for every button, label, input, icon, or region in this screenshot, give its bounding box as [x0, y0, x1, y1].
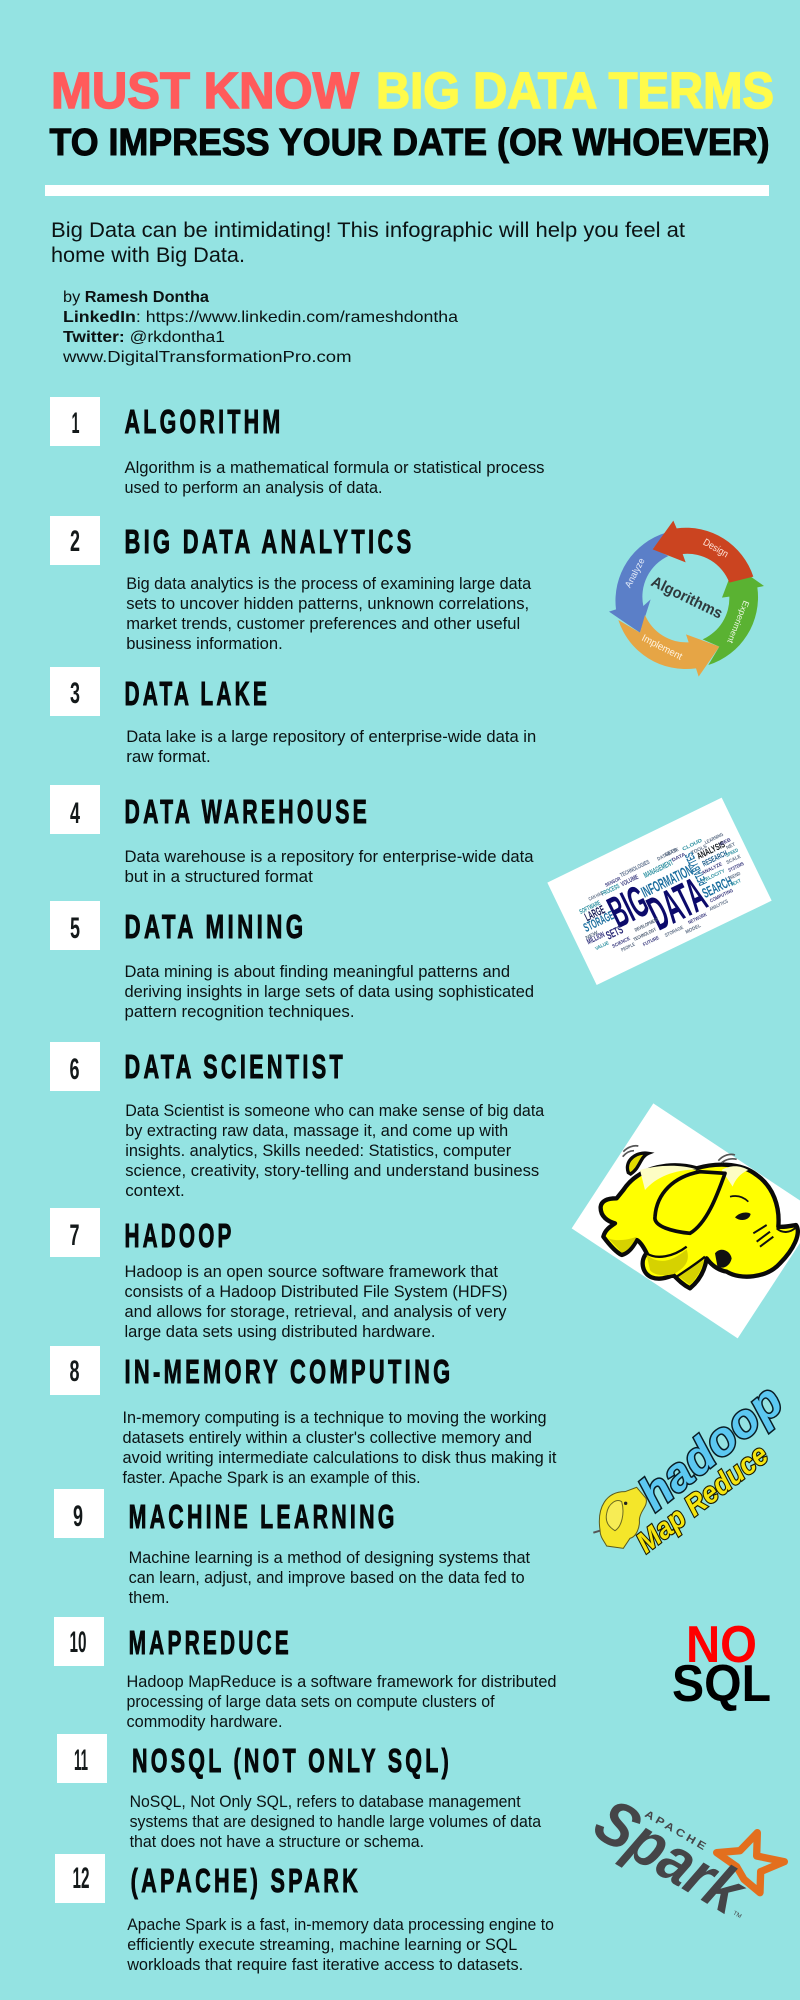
- term 9: machine learning: can learn, adjust, and improve based on the data fed to: [129, 1568, 525, 1587]
- small word cloud filler words: DATABASE: [656, 847, 681, 863]
- term 4: data warehouse: [50, 785, 534, 886]
- small word cloud filler words: COMPUTING: [709, 888, 735, 904]
- image: big data word cloud: LARGE: [582, 902, 607, 924]
- image: big data word cloud: INFORMATION: [639, 862, 696, 901]
- image: big data word cloud: SETS: [604, 922, 625, 943]
- term 11: nosql: systems that are designed to handle large volumes of data: [130, 1812, 542, 1831]
- term 3: data lake: Data lake is a large repository of enterprise-wide data in: [126, 727, 536, 746]
- term 11: nosql: [57, 1734, 542, 1851]
- image: big data word cloud: STORAGE: [581, 908, 616, 935]
- term 11: nosql: that does not have a structure or schema.: [130, 1832, 424, 1851]
- term 12: apache spark: 12: [72, 1862, 90, 1895]
- image: big data word cloud: DATA: [640, 867, 714, 941]
- term 8: in-memory computing: IN-MEMORY COMPUTING: [124, 1353, 454, 1390]
- logo: hadoop map reduce: [593, 1374, 792, 1560]
- small word cloud filler words: DEVELOPMENT: [634, 917, 660, 934]
- small word cloud filler words: ANALYZE: [701, 861, 724, 876]
- term 8: in-memory computing: [50, 1346, 557, 1487]
- image: big data word cloud: PETABYTES: [682, 850, 710, 888]
- image: big data word cloud: MILLION: [585, 930, 606, 946]
- small word cloud filler words: SPEED: [725, 847, 740, 859]
- term 3: data lake: DATA LAKE: [124, 675, 270, 712]
- small word cloud filler words: NET: [725, 842, 736, 851]
- small word cloud filler words: MODEL: [685, 923, 702, 936]
- term 7: hadoop: and allows for storage, retrieval, and analysis of very: [124, 1302, 507, 1321]
- intro text: Big Data can be intimidating! This infographic will help you feel at: [51, 219, 685, 242]
- image: big data word cloud: SOFTWARE: [579, 900, 602, 916]
- term 5: data mining: deriving insights in large sets of data using sophisticated: [124, 982, 534, 1001]
- image: big data word cloud: SEARCH: [699, 873, 735, 901]
- small word cloud filler words: NETWORK: [687, 912, 708, 926]
- small word cloud filler words: TEXT: [729, 878, 742, 888]
- term 2: big data analytics: [50, 516, 532, 653]
- term 8: in-memory computing: In-memory computing is a technique to moving the working: [122, 1408, 546, 1427]
- intro text: [51, 219, 685, 267]
- small word cloud filler words: VALUE: [594, 940, 611, 952]
- icon: algorithms cycle: Experiment: [725, 599, 751, 645]
- small word cloud filler words: NEW: [585, 930, 600, 941]
- term 10: mapreduce: commodity hardware.: [126, 1712, 282, 1731]
- small word cloud filler words: [567, 823, 762, 976]
- term 10: mapreduce: [54, 1617, 556, 1731]
- term 7: hadoop: large data sets using distributed hardware.: [124, 1322, 436, 1341]
- term 5: data mining: [50, 901, 534, 1021]
- term 1: algorithm: used to perform an analysis of data.: [124, 478, 382, 497]
- term 7: hadoop: 7: [70, 1219, 80, 1252]
- term 4: data warehouse: Data warehouse is a repository for enterprise-wide data: [124, 847, 534, 866]
- term 7: hadoop: HADOOP: [124, 1217, 234, 1254]
- apache label: APACHE: [642, 1808, 711, 1854]
- term 5: data mining: pattern recognition techniques.: [124, 1002, 354, 1021]
- logo: nosql: [672, 1616, 771, 1713]
- term 6: data scientist: context.: [125, 1181, 185, 1200]
- orange star: [717, 1833, 784, 1893]
- term 11: nosql: 11: [74, 1744, 88, 1777]
- icon: algorithms cycle: Algorithms: [648, 573, 725, 622]
- title line 2: TO IMPRESS YOUR DATE (OR WHOEVER): [50, 122, 770, 164]
- term 9: machine learning: MACHINE LEARNING: [129, 1498, 398, 1535]
- small word cloud filler words: TREND: [727, 871, 742, 882]
- term 8: in-memory computing: avoid writing intermediate calculations to disk thus making it: [122, 1448, 557, 1467]
- term 2: big data analytics: BIG DATA ANALYTICS: [124, 523, 414, 560]
- logo: nosql: NO: [686, 1616, 757, 1674]
- term 3: data lake: 3: [70, 677, 80, 710]
- hadoop wordmark: hadoop: [629, 1374, 792, 1520]
- small word cloud filler words: SCIENCE: [611, 936, 632, 950]
- map reduce wordmark: Map Reduce: [630, 1438, 775, 1560]
- term 2: big data analytics: business information.: [126, 634, 283, 653]
- small word cloud filler words: SETS: [664, 847, 679, 858]
- term 1: algorithm: [50, 397, 544, 497]
- spark wordmark: Spark: [583, 1785, 758, 1929]
- term 12: apache spark: (APACHE) SPARK: [131, 1862, 361, 1899]
- icon: algorithms cycle: [609, 521, 764, 677]
- small word cloud filler words: DATA: [671, 852, 687, 864]
- term 5: data mining: Data mining is about finding meaningful patterns and: [124, 962, 510, 981]
- author credits: by Ramesh Dontha: [63, 289, 209, 306]
- image: big data word cloud: VOLUME: [620, 874, 640, 888]
- term 6: data scientist: Data Scientist is someone who can make sense of big data: [125, 1101, 545, 1120]
- term 6: data scientist: DATA SCIENTIST: [124, 1048, 346, 1085]
- author credits: LinkedIn : https://www.linkedin.com/rameshdontha: [63, 309, 458, 326]
- term 10: mapreduce: processing of large data sets on compute clusters of: [126, 1692, 495, 1711]
- term 2: big data analytics: 2: [70, 525, 80, 558]
- term 9: machine learning: them.: [129, 1588, 170, 1607]
- term 4: data warehouse: but in a structured format: [124, 867, 313, 886]
- author credits: www.DigitalTransformationPro.com: [62, 349, 352, 366]
- term 8: in-memory computing: 8: [70, 1355, 80, 1388]
- term 9: machine learning: 9: [73, 1500, 83, 1533]
- intro text: home with Big Data.: [51, 244, 245, 267]
- small word cloud filler words: SCALE: [726, 854, 742, 866]
- term 1: algorithm: Algorithm is a mathematical formula or statistical process: [124, 458, 544, 477]
- logo: apache spark: [583, 1785, 784, 1929]
- term 10: mapreduce: MAPREDUCE: [129, 1624, 292, 1661]
- small word cloud filler words: CLOUD: [682, 838, 704, 853]
- term 7: hadoop: consists of a Hadoop Distributed File System (HDFS): [124, 1282, 508, 1301]
- image: big data word cloud: [547, 798, 772, 985]
- term 1: algorithm: 1: [72, 407, 80, 440]
- term 6: data scientist: science, creativity, story-telling and understand business: [125, 1161, 539, 1180]
- image: big data word cloud: MANAGEMENT: [642, 858, 675, 880]
- icon: algorithms cycle: Design: [701, 537, 730, 560]
- small word cloud filler words: STORAGE: [664, 925, 685, 939]
- term 2: big data analytics: Big data analytics is the process of examining large data: [126, 574, 532, 593]
- term 10: mapreduce: Hadoop MapReduce is a software framework for distributed: [126, 1672, 556, 1691]
- title line 1 red: MUST KNOW: [51, 62, 360, 119]
- small word cloud filler words: VELOCITY: [702, 868, 727, 884]
- term 8: in-memory computing: datasets entirely within a cluster's collective memory and: [122, 1428, 532, 1447]
- image: yellow hadoop elephant: [572, 1103, 800, 1338]
- small word cloud filler words: CAN HAS: [588, 890, 605, 903]
- small word cloud filler words: WEB: [719, 837, 732, 848]
- term 4: data warehouse: DATA WAREHOUSE: [124, 793, 370, 830]
- term 3: data lake: [50, 667, 536, 766]
- image: big data word cloud: RESEARCH: [701, 849, 729, 868]
- term 12: apache spark: Apache Spark is a fast, in-memory data processing engine to: [127, 1915, 554, 1934]
- term 6: data scientist: [50, 1042, 545, 1200]
- term 5: data mining: DATA MINING: [124, 908, 306, 945]
- logo elephant: [593, 1487, 646, 1548]
- term 2: big data analytics: sets to uncover hidden patterns, unknown correlations,: [126, 594, 529, 613]
- term 12: apache spark: workloads that require fast iterative access to datasets.: [126, 1955, 523, 1974]
- image: big data word cloud: TECHNOLOGIES: [620, 860, 651, 879]
- term 8: in-memory computing: faster. Apache Spark is an example of this.: [122, 1468, 420, 1487]
- term 6: data scientist: insights. analytics, Skills needed: Statistics, computer: [125, 1141, 512, 1160]
- image: big data word cloud: BIG: [600, 875, 656, 937]
- term 9: machine learning: [54, 1489, 530, 1607]
- term 9: machine learning: Machine learning is a method of designing systems that: [129, 1548, 530, 1567]
- image: big data word cloud: PROCESS: [600, 883, 621, 898]
- icon: algorithms cycle: Implement: [640, 633, 684, 663]
- small word cloud filler words: ANALYTICS: [709, 898, 730, 913]
- trademark mark: TM: [732, 1911, 742, 1920]
- term 1: algorithm: ALGORITHM: [124, 403, 284, 440]
- term 6: data scientist: by extracting raw data, massage it, and come up with: [125, 1121, 508, 1140]
- term 10: mapreduce: 10: [70, 1626, 86, 1659]
- term 5: data mining: 5: [70, 912, 80, 945]
- author credits: Twitter: @rkdontha1: [63, 329, 225, 346]
- white divider bar: [45, 185, 769, 196]
- title line 1 yellow: BIG DATA TERMS: [376, 62, 774, 119]
- term 7: hadoop: [50, 1208, 508, 1341]
- icon: algorithms cycle: Analyze: [623, 556, 647, 589]
- small word cloud filler words: SENSOR: [604, 876, 622, 889]
- author credits: [62, 289, 458, 366]
- term 2: big data analytics: market trends, customer preferences and other useful: [126, 614, 520, 633]
- small word cloud filler words: FUTURE: [642, 935, 661, 948]
- small word cloud filler words: PEOPLE: [620, 942, 637, 954]
- title: [50, 62, 774, 164]
- term 12: apache spark: efficiently execute streaming, machine learning or SQL: [127, 1935, 517, 1954]
- term 11: nosql: NOSQL (NOT ONLY SQL): [132, 1742, 452, 1779]
- term 3: data lake: raw format.: [126, 747, 211, 766]
- small word cloud filler words: LEARNING: [704, 832, 725, 846]
- term 12: apache spark: [55, 1854, 554, 1974]
- term 11: nosql: NoSQL, Not Only SQL, refers to database management: [130, 1792, 521, 1811]
- small word cloud filler words: SYSTEMS: [728, 861, 746, 874]
- small word cloud filler words: TECHNOLOGY: [633, 927, 658, 943]
- logo: nosql: SQL: [672, 1655, 771, 1713]
- small word cloud filler words: TOOLS: [690, 843, 709, 856]
- term 4: data warehouse: 4: [70, 797, 80, 830]
- image: big data word cloud: ANALYSIS: [695, 839, 727, 861]
- term 7: hadoop: Hadoop is an open source software framework that: [124, 1262, 498, 1281]
- term 6: data scientist: 6: [70, 1053, 80, 1086]
